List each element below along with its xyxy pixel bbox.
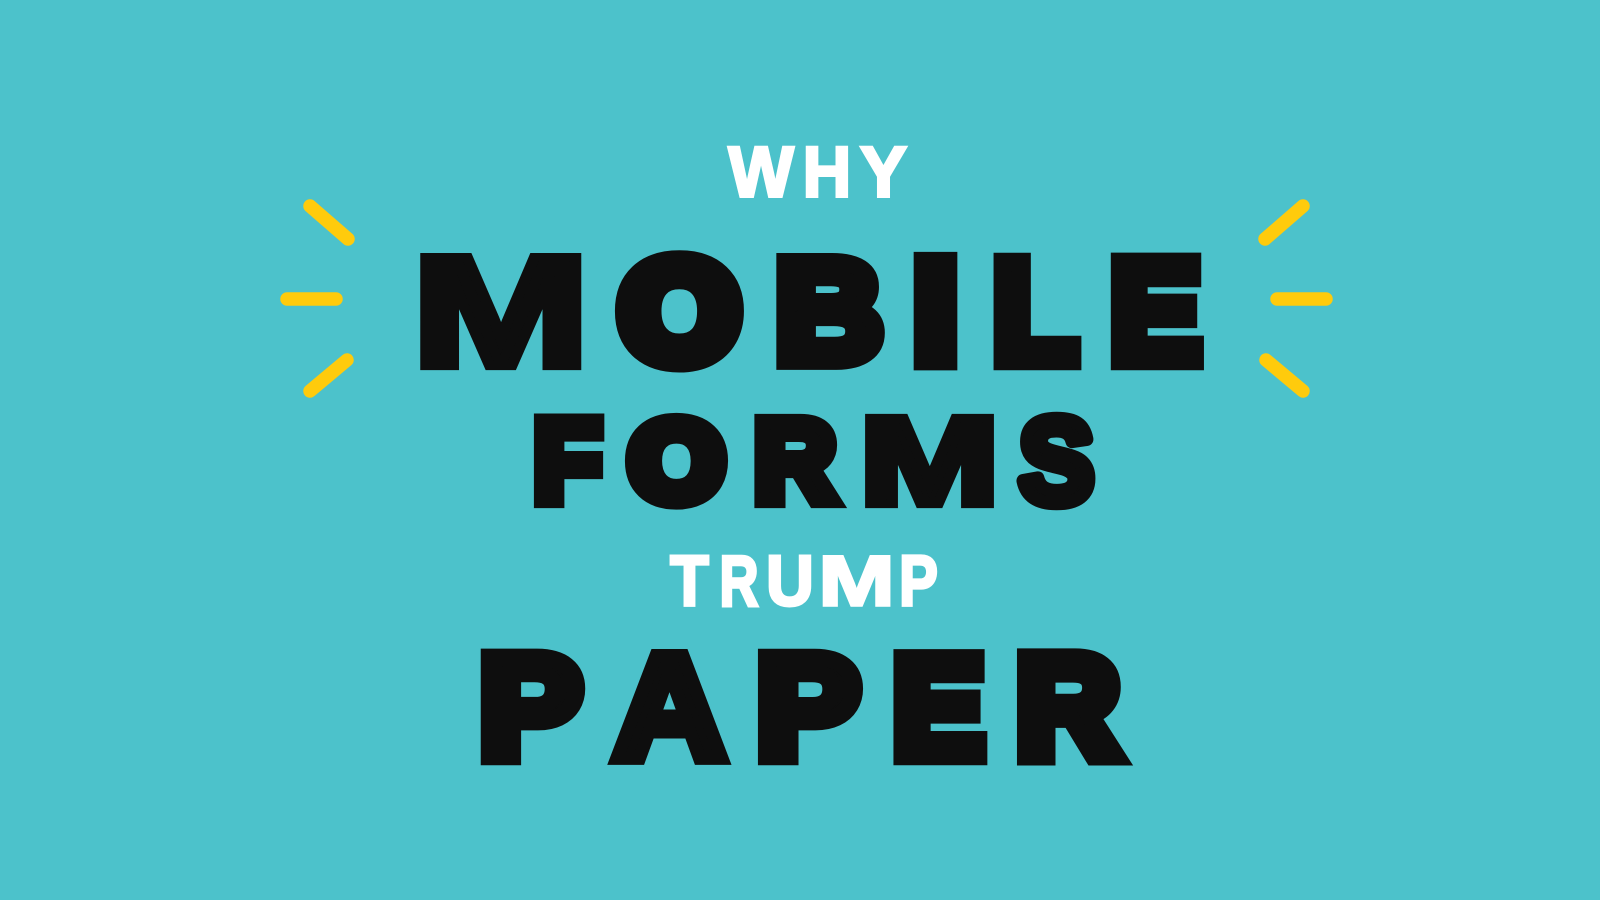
heading word: FORMS: F	[534, 396, 601, 525]
heading word: PAPER: R	[1016, 627, 1120, 788]
heading word: MOBILE: I	[912, 228, 959, 394]
heading word: MOBILE: M	[412, 223, 590, 399]
heading word: TRUMP: R	[720, 542, 758, 621]
heading word: WHY	[728, 132, 907, 212]
heading word: PAPER: P	[480, 627, 581, 788]
heading word: TRUMP: M	[818, 542, 895, 621]
heading word: TRUMP: T	[670, 542, 709, 621]
heading word: FORMS: S	[1019, 395, 1094, 528]
heading word: TRUMP: U	[766, 541, 814, 621]
heading word: PAPER	[480, 623, 1120, 791]
icon: left burst rays	[287, 206, 348, 391]
heading word: TRUMP: P	[899, 541, 938, 621]
heading word: WHY: Y	[860, 132, 907, 212]
heading word: MOBILE: L	[993, 231, 1077, 392]
heading word: FORMS	[534, 392, 1094, 531]
heading word: TRUMP	[670, 541, 938, 621]
heading word: MOBILE: B	[776, 231, 882, 392]
heading word: PAPER: P	[757, 628, 859, 788]
heading word: PAPER: E	[893, 628, 984, 787]
heading word: FORMS: O	[630, 401, 723, 523]
heading word: FORMS: M	[860, 392, 999, 531]
heading word: MOBILE: E	[1110, 231, 1201, 392]
heading word: WHY: W	[728, 133, 794, 212]
heading word: MOBILE: O	[621, 233, 738, 390]
heading word: PAPER: A	[613, 623, 726, 791]
heading word: FORMS: R	[754, 398, 836, 526]
icon: right burst rays	[1265, 206, 1326, 391]
heading word: MOBILE	[412, 223, 1201, 399]
heading word: WHY: H	[803, 133, 851, 212]
